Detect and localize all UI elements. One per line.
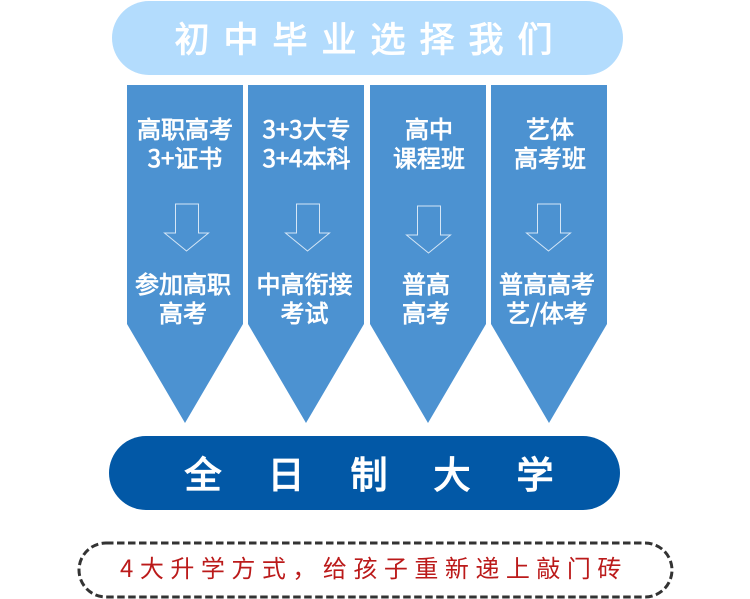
panel: column 3: 普高 [402,265,450,300]
panel: column 3 [370,85,486,423]
panel: column 4: 普高高考 [499,265,595,300]
panel: column 3: 高中 [405,110,453,145]
title banner: 初中毕业选择我们 [174,12,567,63]
panel: column 4: 艺体 [526,110,574,145]
result banner: 全日制大学 [184,445,600,499]
panel: column 1: 高考 [159,294,207,329]
result banner [109,436,620,510]
panel: column 1: 3+证书 [148,139,222,174]
panel: column 2 [248,85,364,423]
panel: column 2: 3+4本科 [263,139,350,174]
panel: column 1: 高职高考 [137,110,233,145]
panel: column 2: 中高衔接 [256,265,352,300]
callout: 4大升学方式，给孩子重新递上敲门砖 [120,549,628,584]
panel: column 3: 课程班 [393,139,465,174]
panel: column 4: 高考班 [514,139,586,174]
callout [79,543,672,597]
title banner [112,1,623,75]
panel: column 1 [127,85,243,423]
panel: column 4: 艺/体考 [506,294,588,329]
panel: column 2: 3+3大专 [263,110,350,145]
panel: column 2: 考试 [280,294,328,329]
panel: column 3: 高考 [402,294,450,329]
panel: column 4 [491,85,607,423]
panel: column 1: 参加高职 [135,265,231,300]
